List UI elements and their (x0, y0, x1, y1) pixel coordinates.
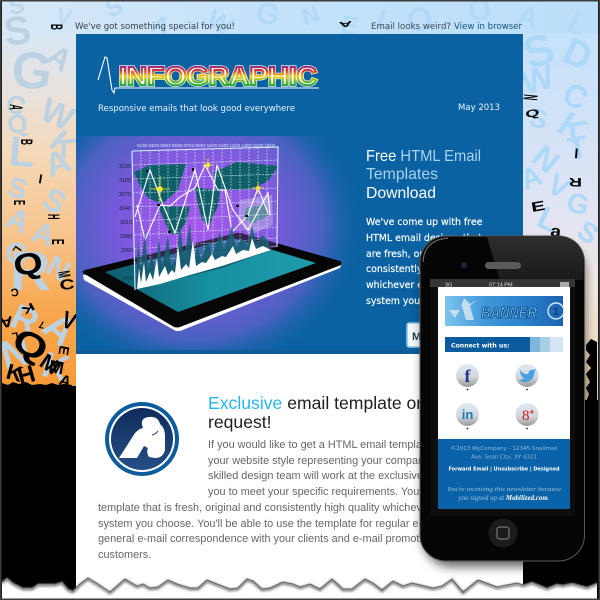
heading: request! (208, 412, 272, 432)
top note: We've got something special for you! (75, 22, 235, 32)
body text: general e-mail correspondence with your clients and e-mail promotions (98, 533, 440, 545)
black scattered letters: E (48, 239, 69, 245)
hero body text: We've come up with free (366, 217, 483, 228)
background: letter collage: S (4, 171, 31, 206)
black scattered letters: K (4, 359, 26, 387)
body text: your website style representing your company, our (208, 455, 451, 467)
icon: google plus: 8 (522, 408, 530, 424)
hero body text: whichever e-mail (366, 280, 446, 291)
axis labels: 3130 (119, 164, 131, 170)
background: letter collage: G (9, 40, 55, 102)
black scattered letters: M (35, 349, 64, 380)
background: letter collage: L (532, 199, 565, 240)
black scattered letters: C (10, 285, 20, 298)
axis labels (119, 164, 134, 282)
background: letter collage: Q (4, 107, 31, 141)
body text: If you would like to get a HTML email template (208, 439, 431, 451)
status bar (430, 279, 575, 288)
background: letter collage: S (517, 23, 561, 79)
axis labels: 2890 (122, 276, 134, 282)
background: letter collage: D (556, 30, 599, 80)
hero body text (366, 217, 483, 307)
black scattered letters: B (17, 139, 36, 145)
axis labels: 3040 (119, 206, 131, 212)
screen (438, 287, 570, 509)
background: letter collage: S (526, 102, 551, 135)
logo: infographic: INFOGRAPHIC (119, 61, 317, 91)
background: letter collage: W (202, 3, 239, 42)
black scattered letters: 7 (38, 318, 46, 330)
view in browser link: Email looks weird? (371, 22, 451, 32)
black scattered letters: Q (7, 321, 54, 370)
background: letter collage: K (44, 123, 84, 165)
axis labels: 2980 (120, 234, 132, 240)
black scattered letters: A (57, 372, 74, 392)
hero illustration: tablet and chart (83, 143, 342, 331)
view in browser link: View in browser (454, 22, 522, 32)
view in browser link (371, 22, 522, 32)
black scattered letters: Q (525, 107, 540, 121)
background: letter collage: R (10, 239, 50, 302)
background: letter collage: V (542, 167, 575, 206)
hero heading: Download (366, 185, 436, 202)
background: letter collage: L (562, 3, 597, 46)
more button (407, 323, 457, 347)
background: letter collage: E (339, 9, 361, 41)
phone footer (438, 439, 570, 509)
connect bar: Connect with us: (451, 342, 510, 350)
background: letter collage: G (563, 186, 593, 221)
date: May 2013 (458, 103, 500, 113)
background: letter collage: C (556, 75, 595, 118)
black scattered letters (0, 19, 597, 402)
status bar: 3G (445, 282, 452, 288)
icon: facebook (456, 364, 479, 390)
hero heading: Templates (366, 166, 438, 183)
background: letter collage: A (41, 39, 78, 78)
icon: google plus: + (529, 408, 535, 416)
black scattered letters: R (569, 175, 582, 188)
tablet (83, 233, 342, 331)
phone (420, 236, 585, 567)
black scattered letters: B (47, 24, 66, 30)
panel: white content (76, 354, 523, 594)
heading: Exclusive email template on (208, 393, 426, 413)
background: letter collage: N (40, 249, 76, 289)
hero body text: HTML email designs that (366, 233, 482, 244)
black scattered letters: H (15, 360, 38, 391)
background: letter collage: A (34, 303, 85, 355)
background: letter collage: W (517, 57, 559, 103)
hero body text: consistently high quality (366, 264, 481, 275)
background: letter collage: S (1, 8, 34, 55)
banner: 1 (553, 306, 559, 318)
black scattered letters: K (19, 299, 37, 317)
black scattered letters: V (58, 306, 80, 336)
black scattered letters: E (10, 200, 28, 205)
black scattered letters: L (11, 329, 20, 342)
icon: facebook: f (464, 366, 472, 386)
icon: round logo (105, 402, 179, 476)
status bar: 07:14 PM (489, 282, 513, 288)
background: letter collage: R (5, 295, 46, 343)
background: letter collage: C (2, 87, 30, 122)
black scattered letters: E (55, 344, 73, 356)
icon: twitter (516, 364, 538, 390)
background: letter collage: A (40, 141, 76, 186)
background: letter collage: T (565, 128, 591, 167)
black scattered letters: M (54, 269, 74, 279)
more button: More (412, 331, 438, 343)
black scattered letters: Q (11, 246, 45, 283)
hero body text: are fresh, original and (366, 249, 469, 260)
background: letter collage: N (298, 0, 323, 32)
hero heading: Free HTML Email (366, 148, 481, 165)
body text (98, 439, 464, 561)
black scattered letters: I (37, 171, 44, 187)
background: letter collage: N (526, 138, 566, 180)
icon: google plus (516, 403, 538, 429)
banner (445, 296, 564, 326)
black scattered letters: L (10, 243, 23, 256)
phone footer: You're receiving this newsletter because (447, 486, 561, 493)
connect bar (445, 337, 563, 352)
background: letter collage: K (38, 343, 74, 389)
background: letter collage: C (3, 236, 29, 272)
body text: template that is fresh, original and consistently high quality whichever e-mail (98, 502, 464, 514)
hero body text: system you choose. (366, 296, 459, 307)
background: letter collage: L (373, 3, 398, 37)
background: letter collage: A (148, 10, 173, 42)
body text: skilled design team will work at the exclusive e-mail (208, 470, 456, 482)
icon: linkedin (456, 403, 479, 429)
black scattered letters: H (44, 214, 63, 220)
logo: infographic: INFOGRAPHIC (119, 61, 317, 91)
black scattered letters: M (47, 356, 66, 379)
black scattered letters: a (550, 222, 562, 241)
body text: you to meet your specific requirements. You'll get (208, 486, 444, 498)
phone footer: Forward Email | Unsubscribe | Designed (448, 466, 560, 472)
black scattered letters: A (338, 19, 353, 29)
axis labels: 2950 (121, 248, 133, 254)
black scattered letters: E (530, 197, 547, 215)
tagline: Responsive emails that look good everywhere (98, 104, 295, 114)
black scattered letters: C (59, 276, 75, 293)
background: letter collage: A (1, 201, 35, 241)
background: letter collage: A (516, 160, 546, 196)
glare (487, 237, 584, 280)
chart panel (119, 143, 278, 290)
background: letter collage: S (36, 180, 73, 222)
black scattered letters: N (518, 94, 541, 101)
background: letter collage: W (35, 91, 81, 139)
black scattered letters: A (4, 104, 26, 111)
phone footer: Ave, Snail City, XY 4321 (471, 454, 537, 460)
axis labels: 3010 (120, 220, 132, 226)
panel: blue header (76, 34, 523, 354)
hero heading (366, 148, 481, 202)
background: letter collage: V (54, 3, 75, 31)
phone footer: you signed up at Mobilized.com. (458, 494, 550, 502)
background: letter collage: L (7, 127, 37, 176)
black scattered letters: I (574, 145, 579, 161)
speaker and camera (461, 262, 521, 269)
heading (208, 393, 426, 432)
home button (488, 518, 518, 548)
date labels: 01/03 04/03 05/03 06/03 07/03 08/03 11/03 12/03 13/03 14/03 15/03 16/03 (137, 143, 275, 148)
spikes (136, 222, 271, 289)
phone footer: ©2013 MyCompany - 12345 Snailmail (450, 445, 558, 452)
axis labels: 3070 (119, 192, 131, 198)
axis labels: 3100 (119, 178, 131, 184)
icon: linkedin: in (462, 407, 473, 422)
background: letter collage: A (28, 216, 59, 254)
stars (150, 158, 264, 202)
body text: system you choose. You'll be able to use the template for regular e-mail (98, 518, 442, 530)
background: letter collage: A (513, 0, 543, 36)
banner: BANNER (481, 305, 538, 322)
torn paper edge (2, 578, 597, 600)
body text: customers. (98, 549, 151, 561)
logo: infographic (98, 57, 319, 93)
background: letter collage: K (550, 103, 595, 151)
